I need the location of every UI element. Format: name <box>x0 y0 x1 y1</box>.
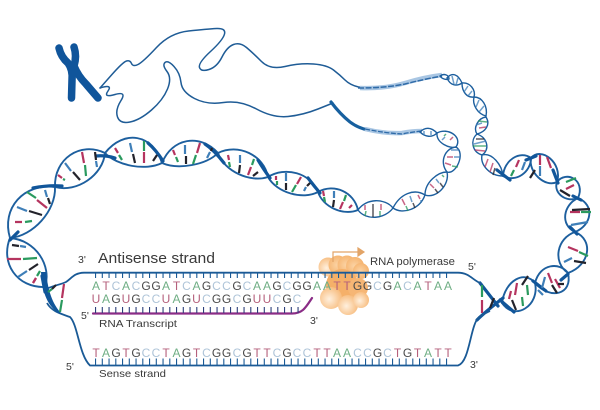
DNA double helix: left and top section <box>7 138 358 292</box>
antisense sequence: G <box>302 279 312 293</box>
antisense sequence: A <box>263 279 271 293</box>
sense sequence: C <box>303 346 312 360</box>
antisense sequence: G <box>141 279 151 293</box>
antisense sequence: A <box>434 279 442 293</box>
sense sequence: T <box>122 346 130 360</box>
sense strand backbone <box>47 303 490 366</box>
RNA sequence: G <box>212 292 221 306</box>
label: RNA transcript: RNA Transcript <box>99 318 177 330</box>
RNA sequence: G <box>282 292 292 306</box>
sense sequence: T <box>193 346 201 360</box>
RNA sequence: U <box>263 292 271 306</box>
label: 5 prime transcript: 5' <box>81 310 89 322</box>
sense sequence: C <box>152 346 161 360</box>
antisense sequence: T <box>333 279 341 293</box>
antisense sequence: C <box>403 279 412 293</box>
RNA sequence: G <box>242 292 252 306</box>
antisense sequence: A <box>122 279 130 293</box>
sense sequence: G <box>403 346 412 360</box>
sense sequence: T <box>323 346 331 360</box>
RNA sequence: G <box>131 292 141 306</box>
RNA sequence: U <box>192 292 201 306</box>
antisense sequence: A <box>92 279 100 293</box>
sense sequence: G <box>242 346 252 360</box>
RNA sequence: G <box>222 292 231 306</box>
antisense sequence: G <box>232 279 242 293</box>
antisense sequence: T <box>424 279 432 293</box>
antisense sequence: G <box>292 279 302 293</box>
sense sequence: G <box>212 346 221 360</box>
sense sequence: C <box>353 346 362 360</box>
RNA sequence: G <box>111 292 121 306</box>
label: RNA polymerase: RNA polymerase <box>370 256 455 268</box>
sense sequence: G <box>282 346 292 360</box>
sense sequence: A <box>102 346 110 360</box>
sense sequence: A <box>333 346 341 360</box>
antisense strand backbone <box>45 273 482 290</box>
arrow: transcription direction <box>333 248 364 262</box>
antisense sequence: G <box>202 279 211 293</box>
sense sequence: C <box>363 346 372 360</box>
sense sequence: T <box>162 346 170 360</box>
RNA sequence: C <box>142 292 151 306</box>
sense sequence: G <box>182 346 191 360</box>
RNA sequence: C <box>152 292 161 306</box>
sense sequence: T <box>434 346 442 360</box>
sense sequence: T <box>313 346 321 360</box>
DNA double helix: right descending section <box>440 75 591 320</box>
coiled fibre: lower band <box>331 102 422 134</box>
sense sequence: T <box>92 346 100 360</box>
label: sense strand: Sense strand <box>99 368 166 380</box>
sense sequence: C <box>142 346 151 360</box>
label: 3 prime transcript: 3' <box>310 315 318 327</box>
sense sequence: G <box>111 346 121 360</box>
label: 5 prime antisense: 5' <box>468 261 476 273</box>
RNA sequence: U <box>253 292 261 306</box>
sense sequence: T <box>444 346 452 360</box>
antisense sequence: T <box>173 279 181 293</box>
antisense sequence: C <box>112 279 121 293</box>
label: 5 prime sense: 5' <box>66 361 74 373</box>
polymerase enzyme <box>318 256 369 315</box>
antisense sequence: G <box>151 279 161 293</box>
sense sequence: A <box>424 346 432 360</box>
antisense sequence: A <box>393 279 402 293</box>
lower chromatin fibre <box>100 62 333 122</box>
RNA sequence: U <box>122 292 130 306</box>
antisense sequence: A <box>162 279 170 293</box>
upper chromatin fibre <box>100 28 367 88</box>
sense sequence: G <box>131 346 141 360</box>
antisense sequence: T <box>343 279 351 293</box>
antisense sequence: C <box>243 279 252 293</box>
sense sequence: C <box>202 346 211 360</box>
RNA sequence: U <box>162 292 170 306</box>
antisense sequence: C <box>212 279 221 293</box>
DNA double helix: thin receding section <box>358 128 460 217</box>
sense sequence: G <box>373 346 382 360</box>
antisense sequence: G <box>383 279 392 293</box>
sense sequence: T <box>253 346 261 360</box>
RNA sequence: G <box>182 292 191 306</box>
label: 3 prime sense: 3' <box>470 359 478 371</box>
antisense sequence: C <box>283 279 292 293</box>
RNA sequence: A <box>102 292 110 306</box>
antisense sequence: A <box>323 279 331 293</box>
sense sequence: A <box>343 346 351 360</box>
antisense sequence: A <box>253 279 261 293</box>
sense sequence: T <box>394 346 402 360</box>
sense sequence: C <box>273 346 282 360</box>
antisense sequence: A <box>444 279 452 293</box>
sense sequence: G <box>222 346 231 360</box>
antisense sequence: T <box>102 279 110 293</box>
antisense sequence: C <box>182 279 191 293</box>
sense sequence: C <box>233 346 242 360</box>
sense sequence: C <box>383 346 392 360</box>
antisense sequence: C <box>132 279 141 293</box>
RNA sequence: C <box>293 292 302 306</box>
sense sequence: C <box>293 346 302 360</box>
coiled fibre: upper band <box>358 75 442 88</box>
antisense sequence: A <box>313 279 321 293</box>
antisense sequence: C <box>373 279 382 293</box>
antisense sequence: G <box>363 279 372 293</box>
antisense sequence: A <box>192 279 201 293</box>
label: 3 prime antisense: 3' <box>78 254 86 266</box>
sense sequence: A <box>172 346 181 360</box>
antisense sequence: G <box>272 279 282 293</box>
heading: antisense strand: Antisense strand <box>98 251 215 267</box>
RNA transcript backbone <box>93 298 312 314</box>
RNA sequence: U <box>92 292 100 306</box>
RNA sequence: C <box>202 292 211 306</box>
antisense sequence: A <box>413 279 422 293</box>
icon: chromosome <box>59 47 98 98</box>
RNA sequence: A <box>172 292 181 306</box>
antisense sequence: C <box>222 279 231 293</box>
antisense sequence: G <box>353 279 362 293</box>
helix opening: left fork <box>33 272 64 314</box>
RNA sequence: C <box>273 292 282 306</box>
sense sequence: T <box>263 346 271 360</box>
RNA sequence: C <box>233 292 242 306</box>
sense sequence: T <box>414 346 422 360</box>
